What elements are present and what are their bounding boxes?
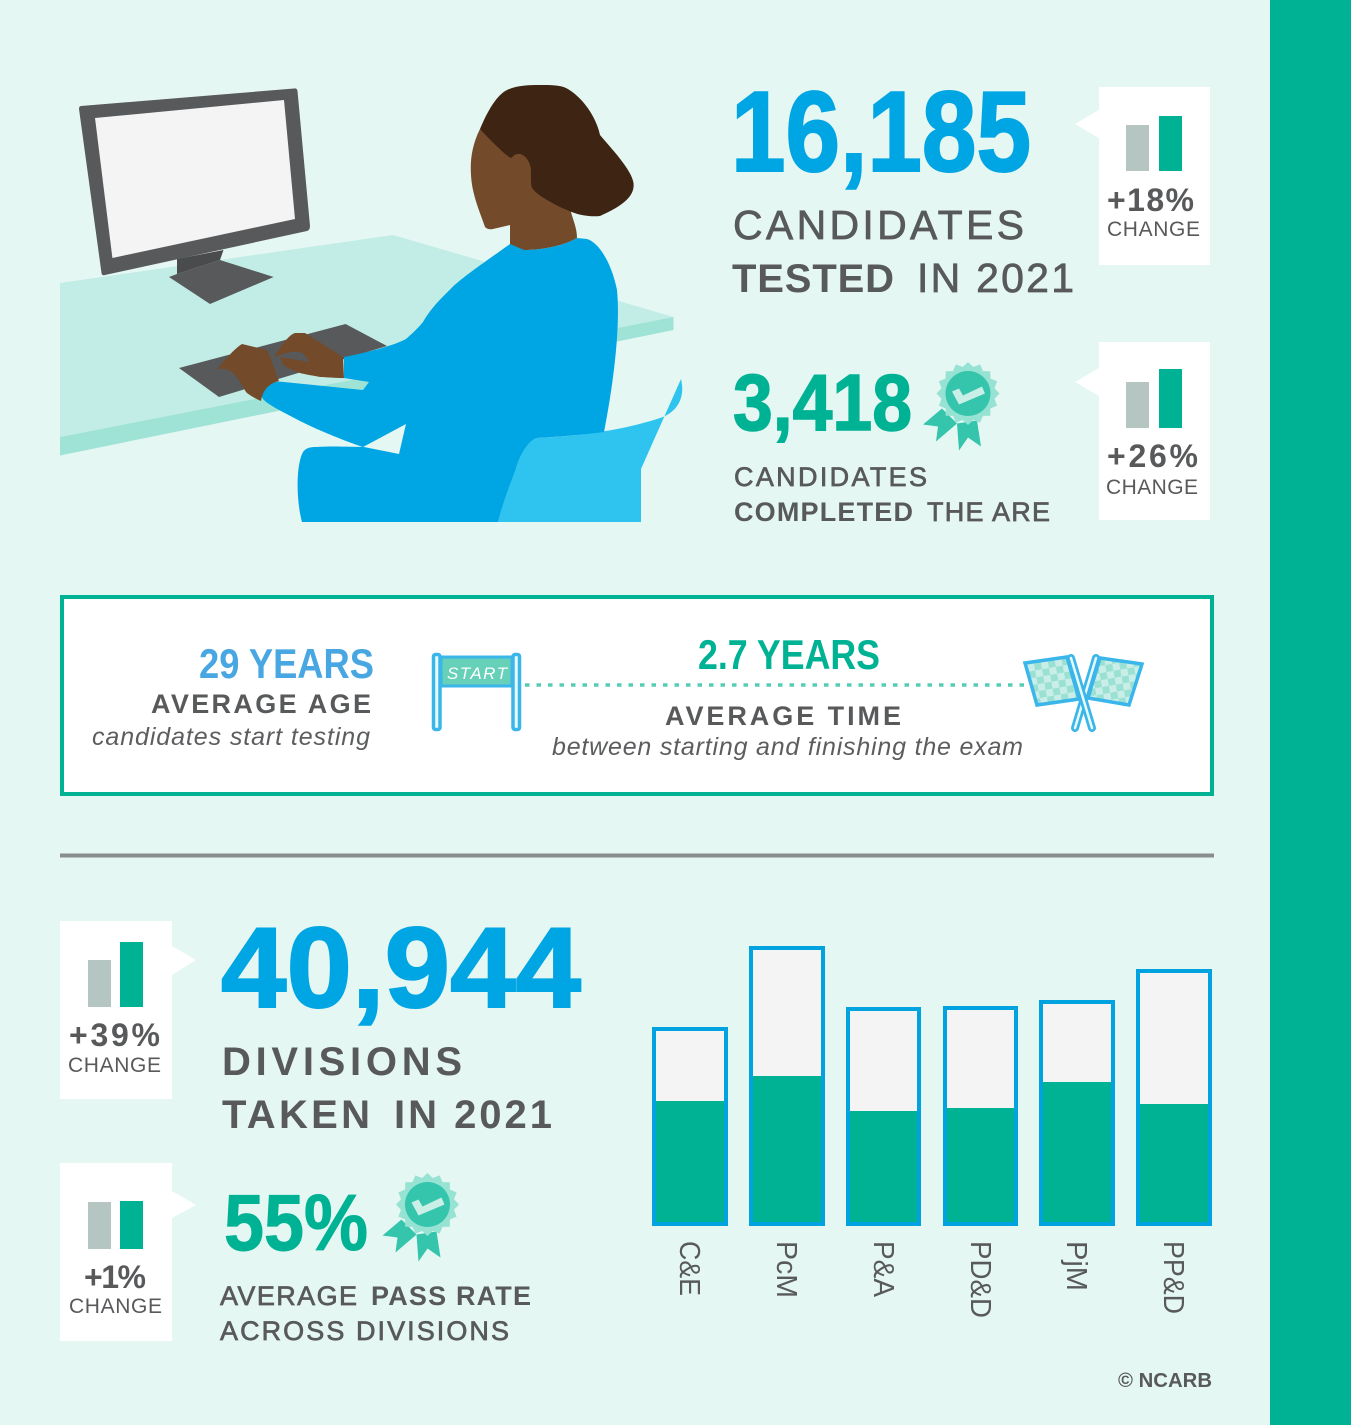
note: candidates start testing: candidates start testing (92, 723, 370, 751)
icon: ribbon badge (923, 362, 1000, 450)
bar: C&E (654, 1029, 726, 1296)
body in blue sweater (261, 238, 618, 522)
stat: divisions taken (221, 905, 581, 1137)
callout: +18% change (1075, 87, 1210, 265)
label line 1: PASS RATE (371, 1281, 531, 1311)
label line 1: DIVISIONS (222, 1040, 462, 1084)
note: between starting and finishing: between starting and finishing the exam (552, 733, 1023, 761)
copyright: © NCARB (1118, 1370, 1212, 1392)
dotted timeline (525, 683, 1030, 687)
bar: PP&D: PP&D (1157, 1241, 1189, 1314)
callout: +26% change: +26% (1107, 438, 1198, 474)
icon: ribbon badge (382, 1173, 459, 1262)
callout: +18% change: CHANGE (1107, 218, 1200, 241)
heading: 2.7 years: 2.7 YEARS (698, 631, 880, 678)
label line 2: TAKEN (222, 1093, 370, 1137)
bar: P&A: P&A (867, 1241, 899, 1298)
head and neck (471, 110, 577, 250)
bar chart: pass rates by division (654, 948, 1210, 1318)
icon: start sign (434, 654, 520, 730)
left hand (217, 344, 279, 401)
label line 1 (220, 1281, 531, 1311)
bar: P&A (848, 1009, 919, 1298)
label line 2 (732, 255, 1074, 301)
bar: PP&D (1138, 971, 1210, 1314)
callout: +1% change: +1% (84, 1259, 146, 1295)
icon: checkered flags (1025, 657, 1142, 728)
label line 2: IN 2021 (394, 1093, 552, 1137)
right hand (274, 333, 344, 378)
label: average age: AVERAGE AGE (151, 689, 371, 719)
heading: 29 years: 29 YEARS (199, 640, 374, 687)
label line 2: ACROSS DIVISIONS (220, 1316, 509, 1346)
number 55%: 55% (224, 1178, 368, 1267)
keyboard (179, 324, 387, 397)
desk (60, 235, 674, 456)
label line 2: IN 2021 (917, 255, 1074, 301)
panel: average age and time (62, 597, 1212, 794)
callout: +1% change: CHANGE (69, 1295, 162, 1318)
number 16,185: 16,185 (731, 69, 1031, 196)
bar: PcM: PcM (770, 1241, 802, 1298)
callout: +1% change (60, 1163, 196, 1341)
label line 2: THE ARE (927, 497, 1050, 527)
bar: C&E: C&E (673, 1241, 705, 1296)
bar: PcM (751, 948, 823, 1298)
callout: +26% change (1075, 342, 1210, 520)
monitor (79, 88, 310, 304)
label line 2: COMPLETED (734, 497, 913, 527)
bar: PD&D: PD&D (964, 1241, 996, 1318)
bar: PD&D (945, 1008, 1016, 1318)
label line 2: TESTED (732, 257, 894, 301)
right green band (1270, 0, 1351, 1425)
label line 2 (734, 497, 1050, 527)
bar: PjM: PjM (1060, 1241, 1092, 1291)
chair (498, 379, 682, 522)
number 40,944: 40,944 (221, 905, 581, 1032)
number 3,418: 3,418 (733, 358, 912, 447)
bar: PjM (1041, 1002, 1113, 1291)
label line 1: CANDIDATES (733, 202, 1024, 248)
label line 2 (222, 1093, 552, 1137)
callout: +26% change: CHANGE (1106, 476, 1198, 499)
label line 1: CANDIDATES (734, 462, 927, 492)
callout: +18% change: +18% (1107, 182, 1194, 218)
stat: candidates tested (731, 69, 1074, 301)
icon: start sign: START (447, 664, 509, 683)
illustration: candidate at computer (60, 85, 682, 522)
label: average time: AVERAGE TIME (665, 701, 901, 731)
stat: average pass rate (220, 1178, 531, 1346)
label line 1: AVERAGE (220, 1281, 357, 1311)
callout: +39% change: +39% (69, 1017, 160, 1053)
callout: +39% change: CHANGE (68, 1054, 161, 1077)
hair (480, 85, 634, 216)
callout: +39% change (60, 921, 196, 1099)
stat: candidates completed the ARE (733, 358, 1050, 527)
